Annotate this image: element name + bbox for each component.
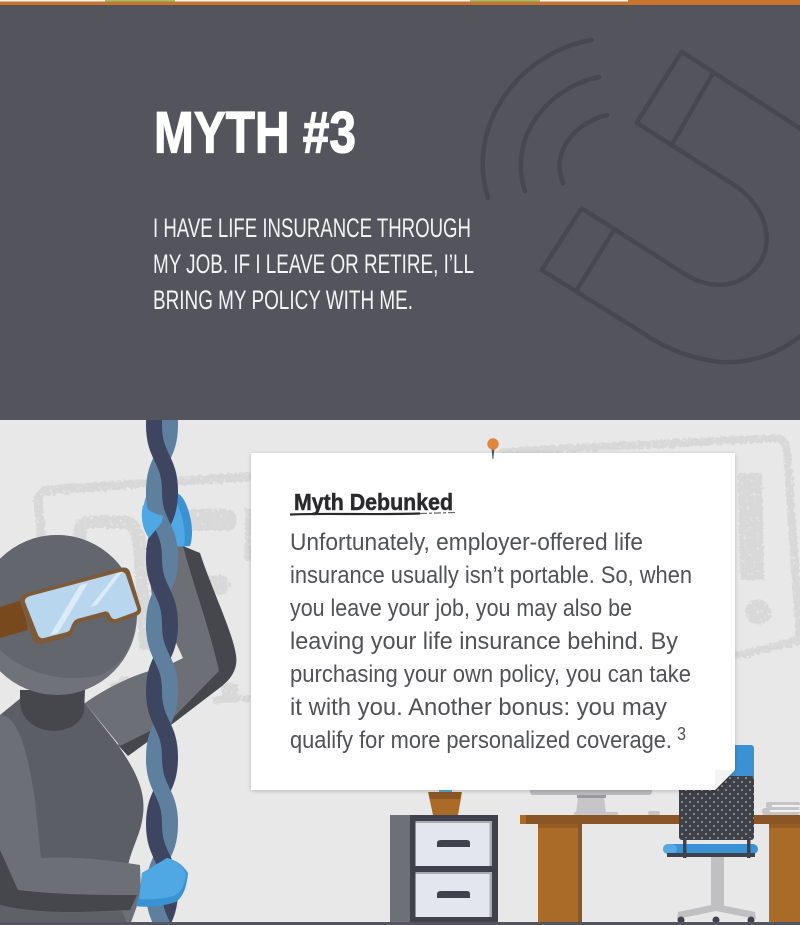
illustration: office chair <box>663 745 758 924</box>
text block: myth statement: I HAVE LIFE INSURANCE THROUGH <box>153 213 471 243</box>
card body text: leaving your life insurance behind. By <box>290 628 679 655</box>
illustration: person climbing rope <box>0 420 236 922</box>
panel: header background <box>0 0 800 420</box>
upper glove <box>143 490 192 548</box>
rope <box>154 358 170 925</box>
card body text: qualify for more personalized coverage. <box>290 727 672 754</box>
head <box>0 535 137 695</box>
text block: myth statement: MY JOB. IF I LEAVE OR RETIRE, I’LL <box>153 249 474 279</box>
card body text <box>290 529 692 754</box>
lower glove <box>136 858 188 907</box>
panel: myth debunked card <box>251 453 735 790</box>
decorative stamp: grunge frame behind card <box>38 438 800 700</box>
illustration: desk with monitor and books <box>520 788 800 922</box>
card body text: it with you. Another bonus: you may <box>290 694 668 721</box>
heading underline <box>290 512 455 514</box>
card body text: you leave your job, you may also be <box>290 595 632 622</box>
title: MYTH #3 <box>154 100 356 166</box>
text block: myth statement <box>153 213 474 315</box>
torso <box>0 697 143 925</box>
bottom edge band <box>0 922 800 925</box>
illustration: filing cabinet <box>390 789 498 923</box>
glove thumb on rope <box>142 505 163 538</box>
card body text: insurance usually isn’t portable. So, when <box>290 562 692 589</box>
icon: orange push pin <box>487 438 499 459</box>
card body text: 3 <box>677 724 686 744</box>
neck <box>20 690 85 731</box>
icon: magnet watermark <box>483 40 800 362</box>
panel: lower office scene background <box>0 420 800 922</box>
card body text: Unfortunately, employer-offered life <box>290 529 643 556</box>
card heading: Myth Debunked <box>294 489 453 515</box>
text block: myth statement: BRING MY POLICY WITH ME. <box>153 285 413 315</box>
top colour strip <box>0 0 800 5</box>
card body text: purchasing your own policy, you can take <box>290 661 691 688</box>
goggles <box>0 568 141 644</box>
raised arm <box>85 546 236 756</box>
